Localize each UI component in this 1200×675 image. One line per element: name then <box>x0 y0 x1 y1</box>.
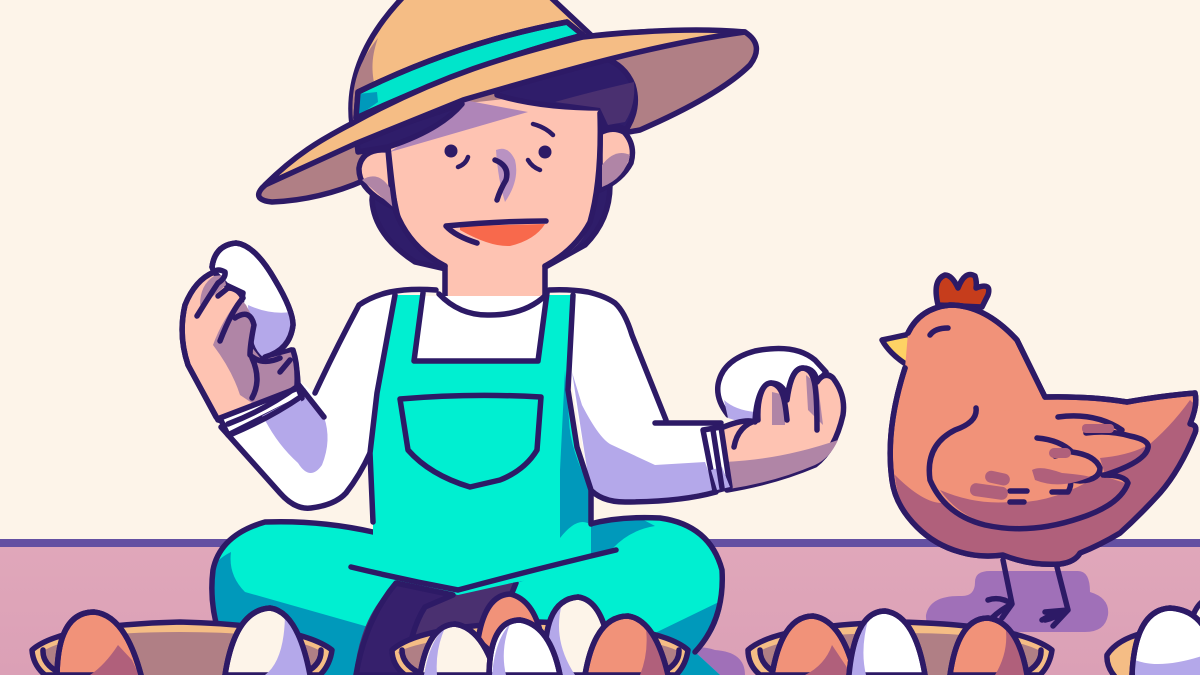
right arm <box>549 290 721 503</box>
face <box>388 95 602 300</box>
front right brown egg <box>585 616 668 675</box>
egg brown <box>57 612 141 675</box>
basket 3 <box>748 611 1052 675</box>
back brown egg <box>478 594 542 660</box>
basket 4 <box>1107 600 1200 675</box>
hen outline <box>890 305 1196 564</box>
farmer shadow <box>690 648 745 675</box>
eyes and brow <box>444 124 553 170</box>
left arm <box>221 289 436 508</box>
right egg <box>718 348 826 425</box>
hen <box>882 274 1196 626</box>
back white egg <box>545 597 608 675</box>
egg white <box>225 608 310 675</box>
floor <box>0 539 1200 675</box>
shirt torso <box>414 294 547 362</box>
hat brim underside <box>259 31 756 202</box>
hen legs <box>988 560 1068 626</box>
left cuff <box>220 386 303 435</box>
left hand <box>182 270 298 423</box>
basket 1 <box>32 608 332 675</box>
basket 2 <box>392 594 688 675</box>
neck <box>442 262 545 320</box>
bib pocket <box>400 395 541 487</box>
hair fringe <box>357 58 635 152</box>
hen comb <box>936 274 989 307</box>
hen eye <box>930 328 948 335</box>
hen wing <box>929 408 1150 529</box>
legs <box>212 518 723 675</box>
hat brim top <box>265 30 745 185</box>
mouth <box>446 221 546 246</box>
left egg <box>212 243 293 357</box>
hen shadow <box>926 571 1108 632</box>
hen belly shadow <box>895 400 1196 564</box>
front left white egg <box>420 624 496 675</box>
right cuff <box>703 427 730 491</box>
head group back: ears and hair <box>359 120 632 270</box>
overalls bib <box>370 293 591 592</box>
right hand <box>720 368 844 490</box>
nose <box>495 149 516 202</box>
hen wing marks <box>969 424 1114 501</box>
pants shadow <box>354 582 516 675</box>
egg white middle <box>849 611 925 675</box>
hat crown <box>351 0 592 125</box>
hen body <box>890 305 1196 564</box>
egg brown right <box>950 618 1027 675</box>
farmer <box>182 0 844 675</box>
egg white <box>1132 608 1200 675</box>
front center white egg <box>489 620 560 675</box>
waist line <box>351 550 616 590</box>
egg brown left <box>772 616 855 675</box>
hen beak <box>882 334 912 368</box>
